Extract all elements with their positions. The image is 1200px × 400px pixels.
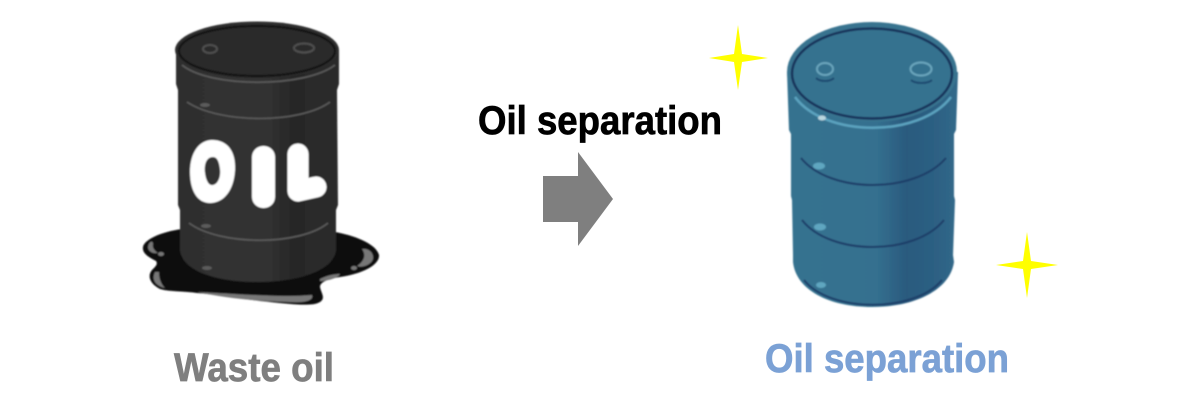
drum caps bbox=[203, 44, 314, 53]
blue drum rib lines bbox=[801, 158, 946, 305]
icon: sparkle top bbox=[709, 25, 768, 90]
puddle highlights bbox=[148, 242, 373, 302]
drum rib lines bbox=[182, 65, 335, 240]
drum body bbox=[176, 50, 339, 282]
blue drum caps bbox=[816, 62, 932, 83]
OIL lettering on drum bbox=[190, 140, 316, 208]
icon: sparkle bottom bbox=[996, 232, 1058, 298]
oil puddle bbox=[143, 229, 379, 305]
label: Oil separation blue: Oil separation bbox=[765, 337, 1009, 381]
blue drum glints bbox=[813, 116, 826, 288]
arrow bbox=[543, 152, 613, 246]
illustration: black waste oil drum with puddle bbox=[143, 22, 379, 305]
illustration: clean blue drum bbox=[787, 22, 958, 307]
drum glints bbox=[200, 103, 212, 270]
drum lid bbox=[175, 22, 339, 78]
blue drum body bbox=[787, 72, 958, 307]
label: Waste oil: Waste oil bbox=[174, 346, 334, 390]
heading: Oil separation: Oil separation bbox=[478, 99, 722, 143]
blue drum lid bbox=[787, 22, 957, 122]
blue drum rim highlight bbox=[795, 97, 951, 128]
